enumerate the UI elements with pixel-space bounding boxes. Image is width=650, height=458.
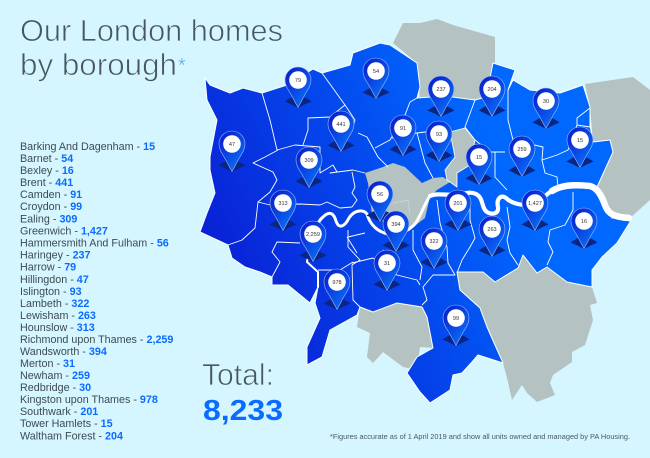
total: Total: — [202, 358, 274, 392]
borough list: Wandsworth - 394 — [20, 346, 107, 358]
pin: Islington 93 — [426, 121, 452, 162]
borough list: Harrow - 79 — [20, 262, 76, 274]
title — [20, 14, 283, 82]
borough list: Newham - 259 — [20, 370, 90, 382]
pin: Greenwich 1,427: 1,427 — [528, 201, 542, 207]
map: London boroughs — [200, 43, 630, 403]
map: surrounding grey areas — [357, 19, 650, 402]
borough list: Barking And Dagenham - 15 — [20, 141, 155, 153]
pin: Ealing 309: 309 — [304, 158, 314, 164]
title: Our London homes — [20, 14, 283, 48]
pin: Bexley 16: 16 — [581, 219, 587, 225]
borough list: Waltham Forest - 204 — [20, 430, 123, 442]
pin: Richmond upon Thames 2,259: 2,259 — [306, 232, 320, 238]
borough list: Hammersmith And Fulham - 56 — [20, 238, 169, 250]
pin: Waltham Forest 204 — [478, 76, 506, 117]
borough list: Lambeth - 322 — [20, 298, 89, 310]
borough list: Croydon - 99 — [20, 201, 82, 213]
pin: Lambeth 322 — [420, 228, 448, 269]
total: 8,233 — [203, 395, 283, 427]
pin: Croydon 99 — [442, 305, 470, 346]
pin: Harrow 79 — [284, 67, 312, 108]
pin: Barnet 54 — [362, 58, 390, 99]
pin: Camden 91 — [390, 115, 416, 156]
pin: Islington 93: 93 — [436, 132, 442, 138]
borough list: Barnet - 54 — [20, 153, 73, 165]
pin: Kingston upon Thames 978: 978 — [332, 280, 342, 286]
pin: Hillingdon 47 — [218, 131, 246, 172]
map: River Thames — [307, 185, 629, 287]
pin: Ealing 309 — [296, 147, 322, 188]
borough list: Bexley - 16 — [20, 165, 74, 177]
pin: Redbridge 30 — [532, 88, 560, 129]
title: by borough — [20, 48, 177, 82]
pin: Haringey 237: 237 — [436, 87, 446, 93]
pin: Barnet 54: 54 — [373, 69, 379, 75]
borough list: Redbridge - 30 — [20, 382, 91, 394]
pin: Hounslow 313: 313 — [278, 201, 288, 207]
pin: Camden 91: 91 — [400, 126, 406, 132]
pin: Wandsworth 394 — [382, 211, 410, 252]
pin: Lewisham 263: 263 — [487, 227, 497, 233]
pin: Kingston upon Thames 978 — [324, 269, 350, 310]
pin: Merton 31 — [374, 250, 400, 291]
title: * — [178, 55, 186, 77]
pin: Bexley 16 — [570, 208, 598, 249]
pin: Southwark 201 — [444, 190, 472, 231]
pin: Brent 441: 441 — [336, 122, 346, 128]
borough list: Tower Hamlets - 15 — [20, 418, 113, 430]
borough list: Camden - 91 — [20, 189, 82, 201]
borough list: Richmond upon Thames - 2,259 — [20, 334, 173, 346]
pin: Hillingdon 47: 47 — [229, 142, 235, 148]
pin: Hounslow 313 — [270, 190, 296, 231]
pin: Merton 31: 31 — [384, 261, 390, 267]
pin: Southwark 201: 201 — [453, 201, 463, 207]
pin: Harrow 79: 79 — [295, 78, 301, 84]
pin: Lambeth 322: 322 — [429, 239, 439, 245]
pin: Greenwich 1,427 — [522, 190, 548, 231]
borough list — [20, 141, 173, 442]
pin: Barking and Dagenham 15 — [566, 127, 594, 168]
pin: Tower Hamlets 15: 15 — [476, 155, 482, 161]
icon: small grey marker at Richmond — [305, 254, 309, 258]
borough list: Kingston upon Thames - 978 — [20, 394, 158, 406]
pin: Brent 441 — [328, 111, 354, 152]
total — [202, 358, 283, 427]
pin: Tower Hamlets 15 — [466, 144, 492, 185]
pin: Redbridge 30: 30 — [543, 99, 549, 105]
pin: Lewisham 263 — [478, 216, 506, 257]
borough list: Lewisham - 263 — [20, 310, 96, 322]
borough list: Hillingdon - 47 — [20, 274, 89, 286]
borough list: Haringey - 237 — [20, 250, 91, 262]
borough list: Merton - 31 — [20, 358, 75, 370]
pin: Waltham Forest 204: 204 — [487, 87, 497, 93]
pin: Wandsworth 394: 394 — [391, 222, 401, 228]
borough list: Hounslow - 313 — [20, 322, 95, 334]
borough list: Greenwich - 1,427 — [20, 225, 108, 237]
borough list: Southwark - 201 — [20, 406, 98, 418]
pin: Newham 259 — [508, 136, 536, 177]
pin: Newham 259: 259 — [517, 147, 527, 153]
pin: Barking and Dagenham 15: 15 — [577, 138, 583, 144]
pin: Hammersmith and Fulham 56 — [366, 181, 394, 222]
pin: Haringey 237 — [428, 76, 454, 117]
map pins — [218, 58, 598, 346]
borough list: Brent - 441 — [20, 177, 73, 189]
map: borough boundaries — [228, 73, 590, 307]
footnote: *Figures accurate as of 1 April 2019 and show all units owned and managed by PA Housing. — [330, 432, 630, 441]
pin: Hammersmith and Fulham 56: 56 — [377, 192, 383, 198]
pin: Croydon 99: 99 — [453, 316, 459, 322]
borough list: Ealing - 309 — [20, 213, 77, 225]
map: Hackney grey area — [445, 128, 475, 187]
pin: Richmond upon Thames 2,259 — [300, 221, 326, 262]
borough list: Islington - 93 — [20, 286, 82, 298]
map: central grey area — [365, 163, 450, 228]
